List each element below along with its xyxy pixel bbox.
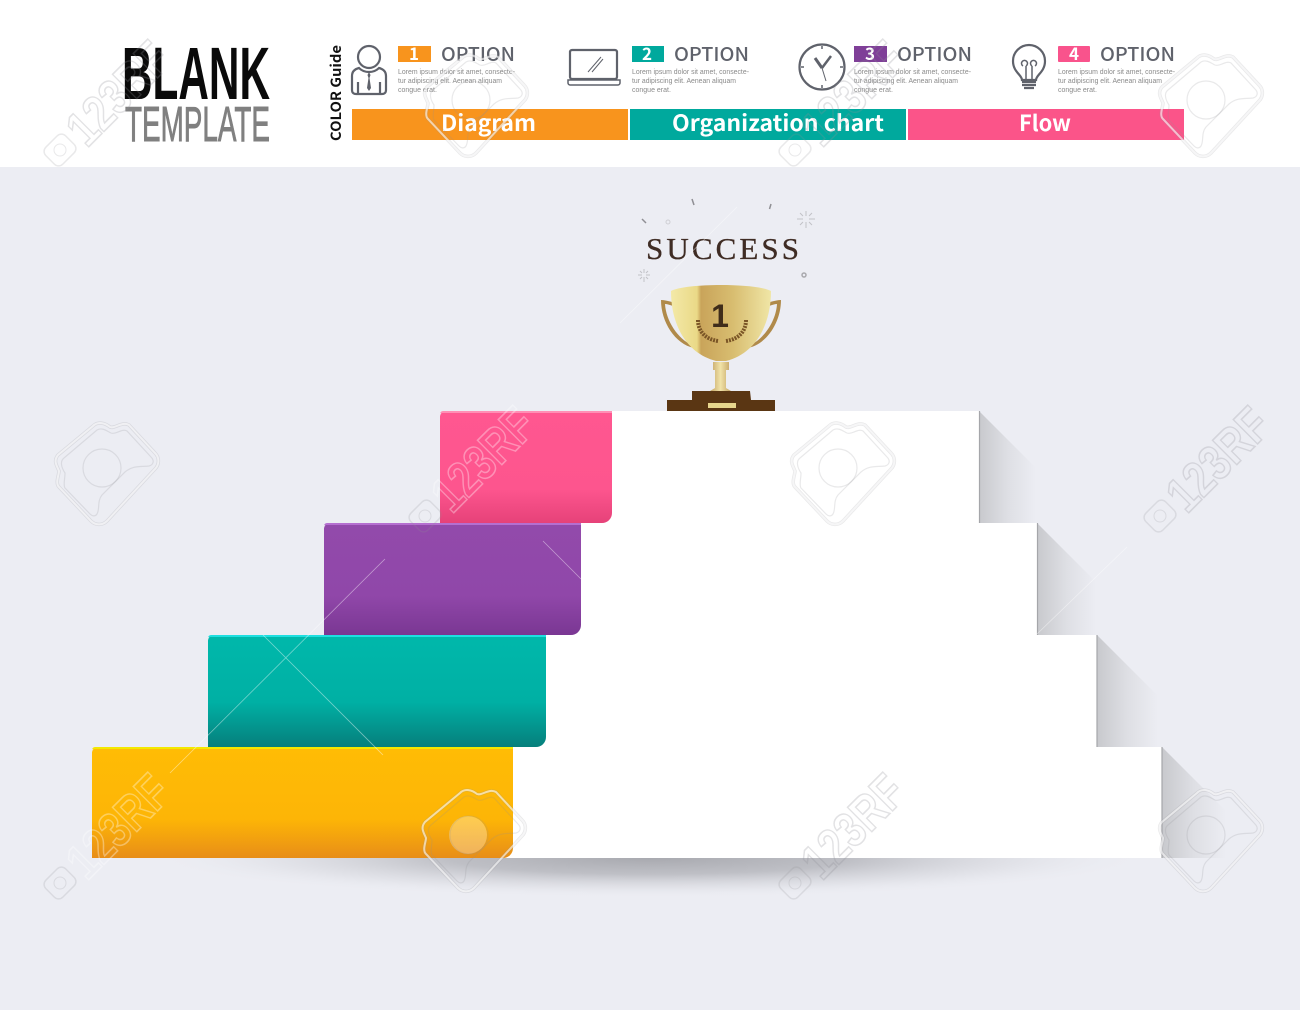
heading: success: SUCCESS (646, 231, 799, 266)
option 2: tur adipiscing elit. Aenean aliquam (632, 78, 736, 85)
watermark: 123RF (420, 396, 546, 522)
step: pink (440, 411, 612, 523)
option 3: 3 (865, 40, 875, 65)
fold edges (980, 411, 1162, 858)
watermark: 123RF (790, 30, 916, 156)
watermark: 123RF (790, 763, 916, 889)
trophy handles (661, 300, 781, 348)
color bar: diagram (352, 106, 628, 140)
option 4: tur adipiscing elit. Aenean aliquam (1058, 78, 1162, 85)
header band (0, 0, 1300, 167)
option 1: OPTION (441, 40, 515, 67)
color bar: diagram: Diagram (441, 106, 536, 138)
icon: light bulb (1013, 45, 1045, 88)
option 3: Lorem ipsum dolor sit amet, consecte- (854, 69, 972, 76)
color bar: flow (908, 106, 1184, 140)
trophy laurels (698, 320, 746, 341)
option 4: 4 (1069, 40, 1079, 65)
white staircase (500, 411, 1162, 858)
option 1 (398, 40, 516, 94)
step: teal (208, 635, 546, 747)
option 4: OPTION (1100, 40, 1175, 67)
title: blank template: TEMPLATE (125, 98, 270, 152)
trophy cup (671, 285, 771, 361)
watermark: 123RF (1155, 396, 1281, 522)
fold shadow: step 1 (979, 411, 1036, 523)
option 2: Lorem ipsum dolor sit amet, consecte- (632, 69, 750, 76)
title: blank template (122, 32, 270, 152)
option 1: Lorem ipsum dolor sit amet, consecte- (398, 69, 516, 76)
trophy (661, 285, 781, 411)
confetti sparkles (638, 199, 815, 282)
trophy number: 1 (711, 298, 729, 334)
step: purple (324, 523, 581, 635)
fold shadow: step 2 (1037, 523, 1096, 635)
icon: clock (800, 44, 844, 90)
option 2: OPTION (674, 40, 749, 67)
option 2 (632, 40, 750, 94)
icon: person with tie (352, 46, 386, 94)
trophy base (667, 391, 775, 411)
watermark: 123RF (55, 763, 181, 889)
color bar: organization chart (630, 106, 906, 140)
option 3: OPTION (897, 40, 972, 67)
watermark: 123RF (55, 30, 181, 156)
option 4 (1058, 40, 1176, 94)
option 2: congue erat. (632, 87, 671, 94)
option 3: tur adipiscing elit. Aenean aliquam (854, 78, 958, 85)
option 1: tur adipiscing elit. Aenean aliquam (398, 78, 502, 85)
color bar: organization chart: Organization chart (672, 106, 884, 138)
ground shadow under stairs (150, 858, 1150, 898)
step: yellow (92, 747, 513, 858)
option 1: 1 (409, 40, 419, 65)
option 4: congue erat. (1058, 87, 1097, 94)
title: blank template: BLANK (122, 32, 270, 115)
option 2: 2 (642, 40, 652, 65)
thin diagonal guide lines (170, 207, 1127, 773)
trophy stem (710, 362, 731, 391)
option 3: congue erat. (854, 87, 893, 94)
trophy plate (708, 403, 736, 408)
color bar: flow: Flow (1019, 106, 1071, 138)
fold shadow: step 3 (1097, 635, 1158, 747)
option 3 (854, 40, 972, 94)
icon: laptop (568, 50, 620, 85)
option 4: Lorem ipsum dolor sit amet, consecte- (1058, 69, 1176, 76)
fold shadow: step 4 (1162, 747, 1226, 858)
vertical label: color guide: COLOR Guide (326, 45, 346, 141)
option 1: congue erat. (398, 87, 437, 94)
